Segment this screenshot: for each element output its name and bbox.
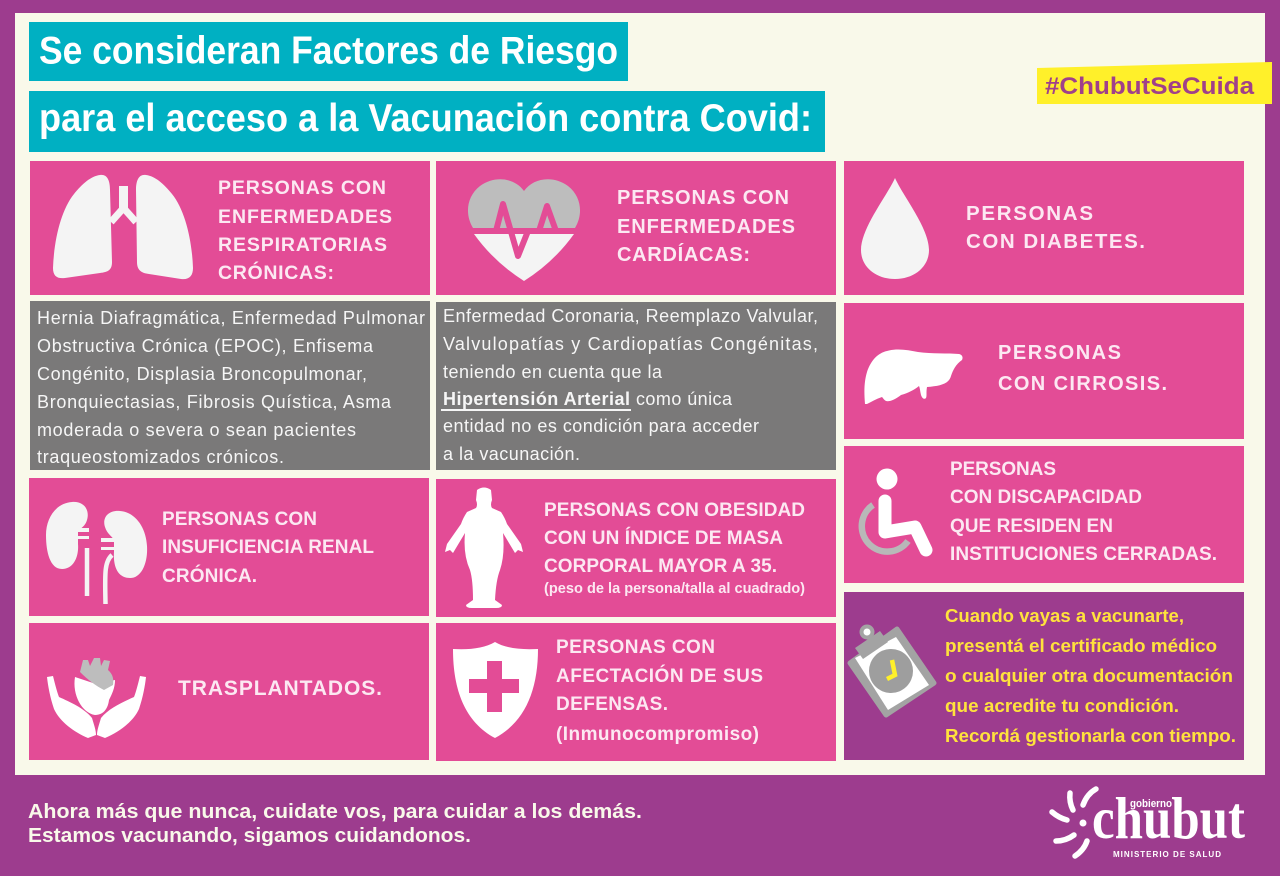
heading: renal: PERSONAS CON	[162, 509, 317, 530]
heading: defensas: AFECTACIÓN DE SUS	[556, 665, 763, 687]
callout: certificado	[844, 592, 1244, 760]
heading: discapacidad: PERSONAS	[950, 459, 1056, 480]
footer message: Ahora más que nunca, cuidate vos, para cuidar a los demás.	[28, 801, 642, 823]
panel: trasplantados	[29, 623, 429, 760]
text: instrucciones: o cualquier otra documentación	[945, 665, 1233, 686]
panel: obesidad	[436, 479, 836, 617]
panel: discapacidad	[844, 446, 1244, 583]
text: instrucciones: Cuando vayas a vacunarte,	[945, 605, 1184, 626]
heading: trasplantados: TRASPLANTADOS.	[178, 677, 382, 700]
heading: defensas: DEFENSAS.	[556, 694, 668, 715]
panel: detalle cardiacas: Hipertensión Arterial	[443, 389, 630, 409]
heading: discapacidad: CON DISCAPACIDAD	[950, 487, 1142, 508]
heading: defensas: (Inmunocompromiso)	[556, 724, 759, 745]
heading: cardiacas: PERSONAS CON	[617, 187, 789, 209]
icon: shield with cross	[453, 642, 538, 738]
heading: discapacidad: INSTITUCIONES CERRADAS.	[950, 544, 1217, 565]
heading: obesidad: CON UN ÍNDICE DE MASA	[544, 527, 783, 549]
hashtag tag	[1037, 62, 1272, 104]
panel: detalle respiratorias: Congénito, Displasia Broncopulmonar,	[37, 364, 367, 384]
heading: renal	[162, 509, 374, 587]
heading: cirrosis: CON CIRROSIS.	[998, 373, 1167, 395]
icon: kidneys	[46, 502, 147, 604]
panel: cirrosis	[844, 303, 1244, 439]
heading: cardiacas: ENFERMEDADES	[617, 216, 795, 238]
heading: diabetes	[966, 202, 1145, 253]
icon: heart with pulse	[468, 179, 580, 281]
heading: diabetes: PERSONAS	[966, 202, 1093, 225]
heading: renal: INSUFICIENCIA RENAL	[162, 537, 374, 558]
heading: cardiacas: CARDÍACAS:	[617, 243, 750, 266]
title line 1	[29, 22, 628, 81]
panel: diabetes	[844, 161, 1244, 295]
footer message: Estamos vacunando, sigamos cuidandonos.	[28, 825, 471, 847]
icon: wheelchair	[862, 468, 926, 552]
icon: hands holding heart	[47, 658, 146, 738]
heading: diabetes: CON DIABETES.	[966, 230, 1145, 253]
heading: obesidad: CORPORAL MAYOR A 35.	[544, 556, 777, 577]
heading: defensas	[556, 637, 763, 745]
heading: respiratorias: RESPIRATORIAS	[218, 234, 387, 256]
title line 1: Se consideran Factores de Riesgo	[39, 30, 618, 72]
text: instrucciones	[945, 605, 1236, 746]
panel: detalle respiratorias: Obstructiva Crónica (EPOC), Enfisema	[37, 336, 374, 356]
icon: lungs	[53, 175, 193, 279]
heading: cirrosis	[998, 342, 1167, 395]
heading: respiratorias: PERSONAS CON	[218, 177, 386, 199]
panel: detalle cardiacas: Valvulopatías y Cardiopatías Congénitas,	[443, 334, 818, 354]
logo: gobierno chubut	[1052, 785, 1245, 859]
heading: defensas: PERSONAS CON	[556, 637, 715, 658]
text: instrucciones: presentá el certificado médico	[945, 635, 1217, 656]
panel: detalle respiratorias: traqueostomizados crónicos.	[37, 447, 284, 467]
panel: respiratorias	[30, 161, 430, 295]
panel: detalle cardiacas: teniendo en cuenta que la	[443, 362, 663, 382]
panel: detalle cardiacas: como única	[636, 389, 733, 409]
logo: gobierno chubut: MINISTERIO DE SALUD	[1113, 850, 1221, 859]
heading: respiratorias: ENFERMEDADES	[218, 206, 392, 228]
logo: gobierno chubut: gobierno	[1130, 798, 1172, 810]
heading: respiratorias: CRÓNICAS:	[218, 260, 334, 284]
icon: clipboard with clock	[850, 624, 934, 715]
panel: detalle respiratorias: moderada o severa o sean pacientes	[37, 420, 356, 440]
hashtag tag: #ChubutSeCuida	[1045, 73, 1255, 100]
heading: obesidad: (peso de la persona/talla al cuadrado)	[544, 581, 805, 597]
heading: discapacidad: QUE RESIDEN EN	[950, 516, 1113, 537]
panel: renal	[29, 478, 429, 616]
heading: obesidad: PERSONAS CON OBESIDAD	[544, 500, 805, 521]
icon: liver	[864, 349, 963, 404]
panel: detalle respiratorias: Hernia Diafragmática, Enfermedad Pulmonar	[37, 308, 425, 328]
heading: discapacidad	[950, 459, 1217, 565]
panel: defensas	[436, 623, 836, 761]
panel: detalle cardiacas	[436, 302, 836, 470]
heading: respiratorias	[218, 177, 392, 284]
logo: gobierno chubut: chubut	[1092, 785, 1245, 851]
icon: drop	[861, 178, 929, 279]
heading: cardiacas	[617, 187, 795, 266]
heading: obesidad	[544, 500, 805, 597]
footer message	[28, 801, 642, 847]
icon: person silhouette	[445, 488, 523, 608]
panel: detalle respiratorias: Bronquiectasias, Fibrosis Quística, Asma	[37, 392, 392, 412]
panel: detalle cardiacas: a la vacunación.	[443, 444, 580, 464]
panel: detalle cardiacas: entidad no es condición para acceder	[443, 416, 759, 436]
heading: cirrosis: PERSONAS	[998, 342, 1121, 364]
text: instrucciones: Recordá gestionarla con tiempo.	[945, 725, 1236, 746]
heading: renal: CRÓNICA.	[162, 565, 257, 587]
text: instrucciones: que acredite tu condición.	[945, 695, 1179, 716]
title line 2	[29, 91, 825, 152]
title line 2: para el acceso a la Vacunación contra Covid:	[39, 97, 812, 140]
panel: cardiacas	[436, 161, 836, 295]
panel: detalle respiratorias	[30, 301, 430, 470]
panel: detalle cardiacas: Enfermedad Coronaria, Reemplazo Valvular,	[443, 306, 818, 326]
